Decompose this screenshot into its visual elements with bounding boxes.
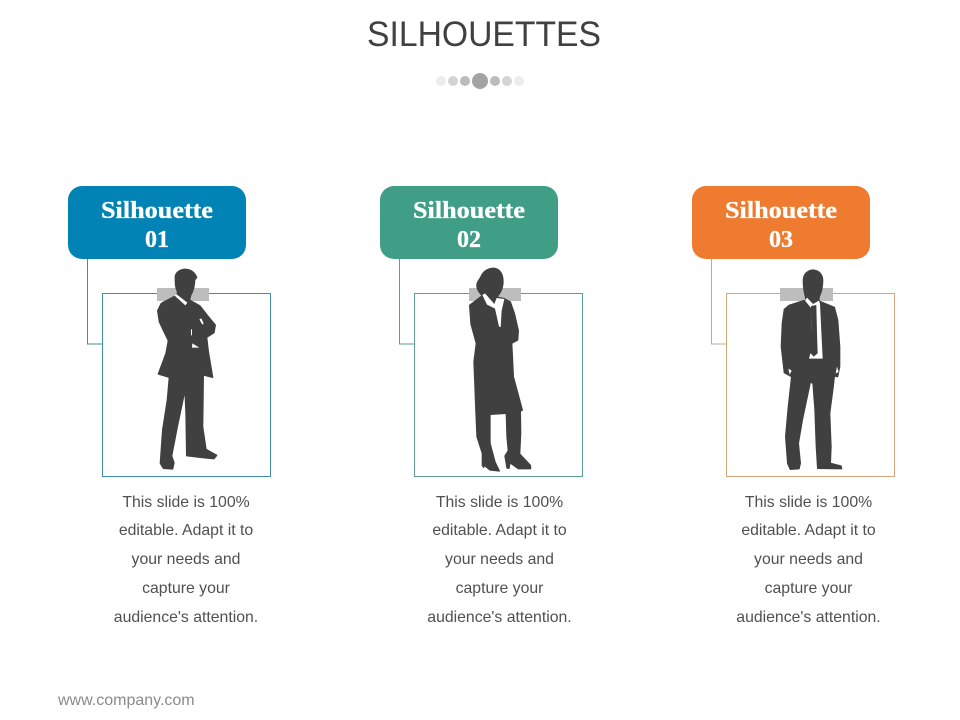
connector line 03 <box>712 259 726 344</box>
description text 02: capture your <box>456 580 543 597</box>
description text 01: capture your <box>142 580 230 597</box>
heading badge 02: 02 <box>457 227 481 253</box>
heading badge 03: 03 <box>769 227 793 253</box>
silhouette: man in suit, hands in pockets <box>781 270 842 469</box>
grey tab 02 <box>469 288 521 301</box>
description text 03: capture your <box>765 580 852 597</box>
decorative dot row under title <box>436 73 524 89</box>
connector line 02 <box>400 259 414 344</box>
description text 02: This slide is 100% <box>436 494 563 511</box>
description text 03: editable. Adapt it to <box>741 522 876 539</box>
panel: silhouette 03 <box>692 186 894 626</box>
silhouette: woman in skirt suit <box>470 268 531 471</box>
picture frame 02 <box>414 294 582 476</box>
silhouette: man with crossed arms <box>158 269 217 469</box>
description text 01 <box>114 494 258 626</box>
description text 01: your needs and <box>132 551 240 568</box>
grey tab 01 <box>157 288 209 301</box>
description text 01: audience's attention. <box>114 609 258 626</box>
panel: silhouette 02 <box>380 186 582 626</box>
description text 02: editable. Adapt it to <box>432 522 567 539</box>
footer website: www.company.com <box>57 692 195 709</box>
panel: silhouette 01 <box>68 186 270 626</box>
connector line 01 <box>88 259 102 344</box>
description text 01: editable. Adapt it to <box>119 522 253 539</box>
heading badge 02 <box>380 186 558 259</box>
description text 03: This slide is 100% <box>745 494 872 511</box>
heading badge 03: Silhouette <box>725 198 837 224</box>
heading badge 01: Silhouette <box>101 198 213 224</box>
heading badge 01 <box>68 186 246 259</box>
heading badge 02: Silhouette <box>413 198 525 224</box>
description text 02 <box>427 494 572 626</box>
picture frame 03 <box>726 294 894 476</box>
description text 03: your needs and <box>754 551 863 568</box>
heading badge 03 <box>692 186 870 259</box>
description text 03 <box>736 494 881 626</box>
description text 02: your needs and <box>445 551 554 568</box>
description text 01: This slide is 100% <box>122 494 250 511</box>
title: SILHOUETTES <box>367 15 601 54</box>
grey tab 03 <box>780 288 833 301</box>
heading badge 01: 01 <box>145 227 169 253</box>
picture frame 01 <box>102 294 270 476</box>
description text 02: audience's attention. <box>427 609 572 626</box>
description text 03: audience's attention. <box>736 609 881 626</box>
